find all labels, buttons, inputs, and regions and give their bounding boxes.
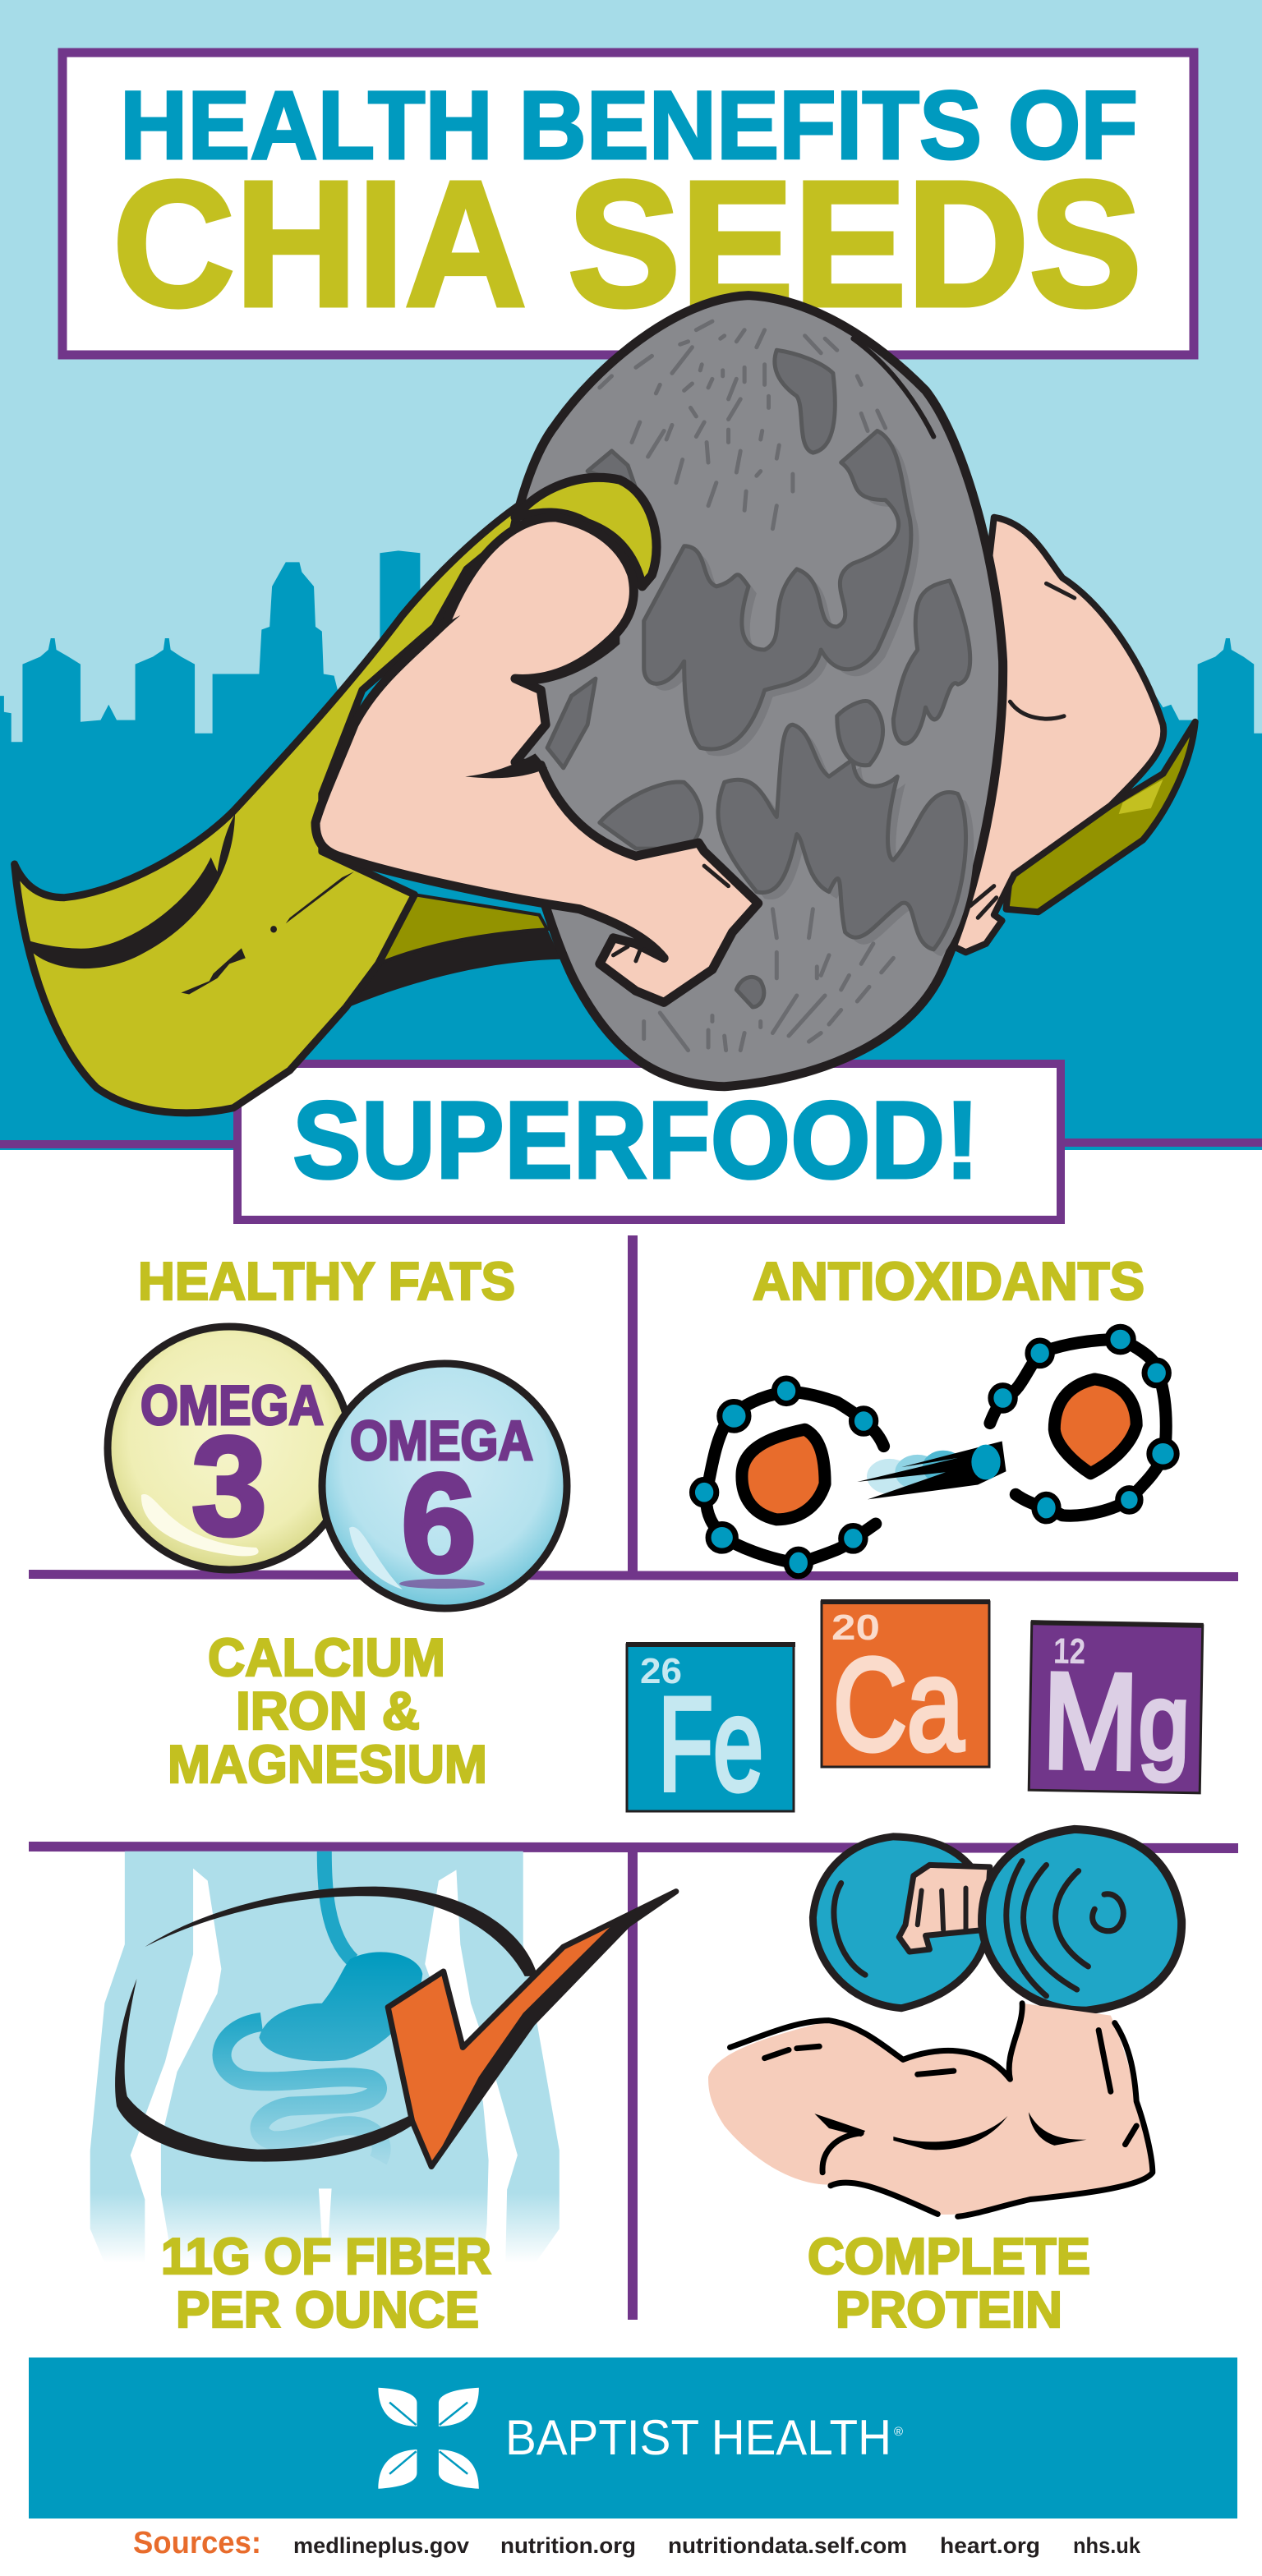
- heading: healthy fats: HEALTHY FATS: [138, 1251, 515, 1311]
- element tile: iron: 26: [640, 1651, 682, 1691]
- sources label: Sources:: [133, 2526, 261, 2560]
- digestive body illustration: [90, 1852, 560, 2266]
- superfood heading: SUPERFOOD!: [292, 1079, 979, 1202]
- caption: 11g of fiber per ounce: 11G OF FIBER: [161, 2229, 491, 2285]
- orange check mark: [388, 1892, 676, 2167]
- footer band: [29, 2358, 1237, 2518]
- arm outline and muscle lines: [730, 2003, 1153, 2216]
- brush circle around stomach: [115, 1887, 537, 2162]
- source list: nutritiondata.self.com: [668, 2533, 907, 2558]
- dumbbell in fist: [813, 1829, 1181, 2011]
- stomach: [259, 1952, 422, 2061]
- superfood box: [237, 1064, 1061, 1220]
- panel divider: middle horizontal: [29, 1570, 1238, 1581]
- source list: medlineplus.gov: [293, 2533, 469, 2558]
- torso silhouette: [90, 1852, 560, 2263]
- omega 3 capsule: [108, 1327, 351, 1570]
- panel divider: lower horizontal: [29, 1842, 1238, 1853]
- element tile: calcium: Ca: [833, 1631, 964, 1778]
- heading: calcium iron and magnesium: IRON &: [236, 1681, 420, 1741]
- purple horizon line right: [1060, 1138, 1262, 1147]
- torso white gaps: [131, 1869, 518, 2266]
- omega 6 capsule: [322, 1364, 567, 1608]
- arm muscle and finger creases: [435, 615, 619, 778]
- sky background: [0, 0, 1262, 1145]
- antioxidant comet: [857, 1441, 1006, 1499]
- near arm and fist: [316, 518, 758, 1002]
- element tile: iron: Fe: [658, 1670, 763, 1819]
- intestines: [222, 2022, 381, 2160]
- purple horizon line left: [0, 1140, 238, 1148]
- seed speckles: [600, 321, 893, 1051]
- icon: baptist health logo: [378, 2388, 479, 2489]
- element tile: magnesium: [1028, 1620, 1204, 1800]
- source list: [293, 2533, 1141, 2558]
- caption: complete protein: [808, 2229, 1090, 2339]
- source list: heart.org: [940, 2533, 1040, 2558]
- element tile: magnesium: 12: [1053, 1631, 1086, 1672]
- seed dark patches: [547, 350, 974, 1007]
- far arm and cape end: [942, 518, 1195, 952]
- heading: calcium iron and magnesium: [168, 1627, 487, 1794]
- panel divider: top vertical: [628, 1235, 638, 1574]
- superhero cape: [15, 478, 656, 1113]
- registered mark: ®: [894, 2425, 903, 2439]
- chia seed: [499, 296, 1003, 1087]
- caption: 11g of fiber per ounce: [161, 2229, 491, 2339]
- antioxidant molecule right: [990, 1327, 1177, 1521]
- source list: nhs.uk: [1073, 2533, 1141, 2558]
- title line: Chia Seeds: CHIA SEEDS: [113, 145, 1142, 344]
- caption: 11g of fiber per ounce: PER OUNCE: [176, 2282, 479, 2339]
- caption: complete protein: PROTEIN: [836, 2282, 1062, 2339]
- city skyline and ground: [0, 550, 1262, 1150]
- panel divider: bottom vertical: [628, 1852, 638, 2320]
- antioxidant molecule left: [692, 1378, 884, 1576]
- omega 3 capsule: 3: [191, 1408, 267, 1565]
- omega 6 capsule: OMEGA: [350, 1410, 533, 1472]
- esophagus: [325, 1852, 352, 1960]
- title box: [62, 53, 1194, 355]
- element tile: calcium: 20: [831, 1608, 880, 1648]
- element tile: magnesium: g: [1138, 1661, 1191, 1782]
- source list: nutrition.org: [500, 2533, 636, 2558]
- cape collar over shoulder: [515, 477, 656, 586]
- heading: calcium iron and magnesium: MAGNESIUM: [168, 1734, 487, 1794]
- element tile: iron: [626, 1642, 795, 1819]
- brand name: BAPTIST HEALTH: [505, 2410, 891, 2465]
- caption: complete protein: COMPLETE: [808, 2229, 1090, 2285]
- omega 3 capsule: OMEGA: [140, 1374, 324, 1437]
- heading: antioxidants: ANTIOXIDANTS: [753, 1251, 1145, 1311]
- heading: calcium iron and magnesium: CALCIUM: [208, 1627, 445, 1687]
- omega 6 capsule: 6: [401, 1445, 477, 1602]
- title line: Health Benefits Of: HEALTH BENEFITS OF: [120, 71, 1138, 180]
- flexed arm: [708, 2003, 1153, 2216]
- element tile: magnesium: M: [1041, 1644, 1158, 1799]
